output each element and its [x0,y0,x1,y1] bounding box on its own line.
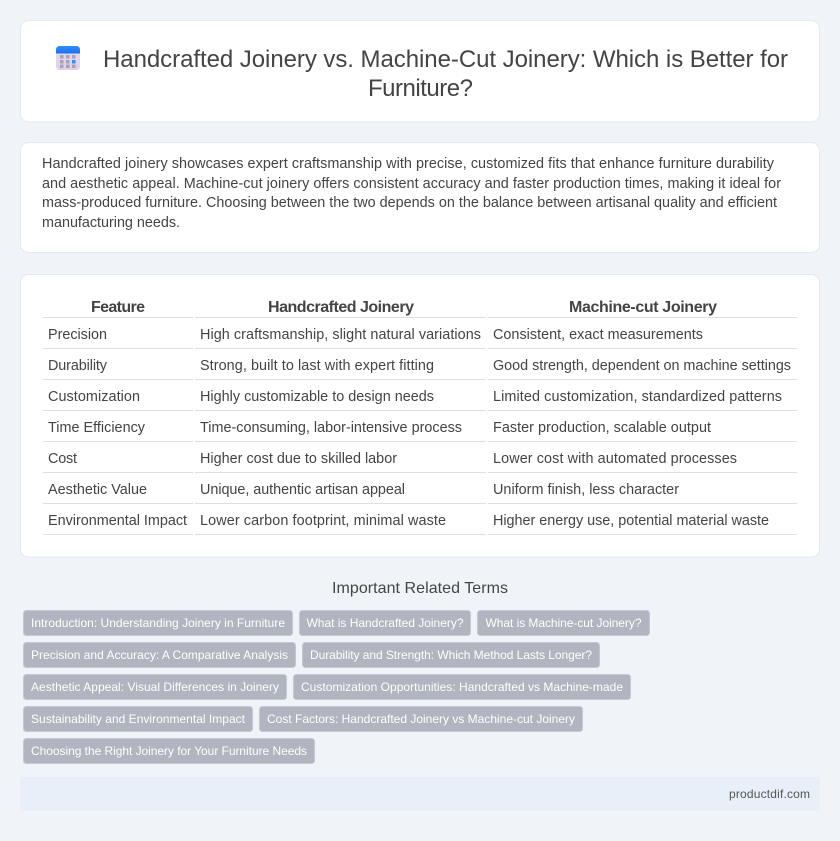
tag: What is Machine-cut Joinery? [486,616,642,630]
intro paragraph: manufacturing needs. [42,215,180,231]
tag [24,642,296,668]
tag: Introduction: Understanding Joinery in Furniture [31,616,285,630]
row: aesthetic value: Uniform finish, less character [493,482,679,498]
tag: Customization Opportunities: Handcrafted vs Machine-made [301,680,623,694]
row: durability [43,358,797,380]
title [103,46,788,102]
title: Furniture? [368,75,473,102]
tag: What is Handcrafted Joinery? [306,616,464,630]
tag [302,642,600,668]
row: environmental impact [43,513,797,535]
tag: Choosing the Right Joinery for Your Furniture Needs [31,744,307,758]
row: durability: Durability [48,358,108,374]
row: cost: Higher cost due to skilled labor [200,451,397,467]
tag [300,610,470,636]
row: cost: Cost [48,451,77,467]
row: customization: Highly customizable to design needs [200,389,434,405]
row: time efficiency: Time Efficiency [48,420,146,436]
row: cost: Lower cost with automated processes [493,451,737,467]
tag [294,674,630,700]
row: customization: Customization [48,389,140,405]
row: time efficiency: Faster production, scalable output [493,420,711,436]
row: precision: Precision [48,327,107,343]
tag: Aesthetic Appeal: Visual Differences in Joinery [31,680,279,694]
tag [24,738,314,764]
intro paragraph [42,156,781,231]
row: cost [43,451,797,473]
row: time efficiency [43,420,797,442]
tag: Durability and Strength: Which Method Lasts Longer? [310,648,592,662]
table header: Machine-cut Joinery [569,299,717,316]
title: Handcrafted Joinery vs. Machine-Cut Joinery: Which is Better for [103,46,788,73]
tag: Cost Factors: Handcrafted Joinery vs Machine-cut Joinery [267,712,575,726]
row: precision: High craftsmanship, slight natural variations [200,327,481,343]
row: precision: Consistent, exact measurements [493,327,703,343]
footer [20,777,820,811]
row: environmental impact: Higher energy use, potential material waste [493,513,769,529]
tag [260,706,582,732]
tag [24,674,286,700]
table header [43,299,797,318]
panel: intro text [20,142,820,252]
heading: important related terms: Important Related Terms [332,580,508,597]
panel: comparison table [20,274,820,557]
panel: title card [20,20,820,122]
intro paragraph: mass-produced furniture. Choosing between the two depends on the balance between artisanal quality and efficient [42,195,777,211]
row: environmental impact: Lower carbon footprint, minimal waste [200,513,446,529]
intro paragraph: and aesthetic appeal. Machine-cut joinery offers consistent accuracy and faster production times, making it ideal for [42,176,781,192]
icon: calendar [56,46,80,70]
row: customization: Limited customization, standardized patterns [493,389,782,405]
row: aesthetic value: Unique, authentic artisan appeal [200,482,405,498]
intro paragraph: Handcrafted joinery showcases expert craftsmanship with precise, customized fits that enhance furniture durability [42,156,775,172]
tag: Sustainability and Environmental Impact [31,712,246,726]
row: durability: Good strength, dependent on machine settings [493,358,791,374]
row: precision [43,327,797,349]
row: aesthetic value [43,482,797,504]
table header: Handcrafted Joinery [268,299,414,316]
row: durability: Strong, built to last with expert fitting [200,358,434,374]
row: customization [43,389,797,411]
tag [478,610,650,636]
row: aesthetic value: Aesthetic Value [48,482,147,498]
tag [24,610,292,636]
row: time efficiency: Time-consuming, labor-intensive process [200,420,462,436]
row: environmental impact: Environmental Impact [48,513,187,529]
tag: Precision and Accuracy: A Comparative Analysis [31,648,288,662]
table header: Feature [91,299,145,316]
footer: productdif.com [729,787,810,801]
panel: related term tags [24,610,650,764]
tag [24,706,252,732]
